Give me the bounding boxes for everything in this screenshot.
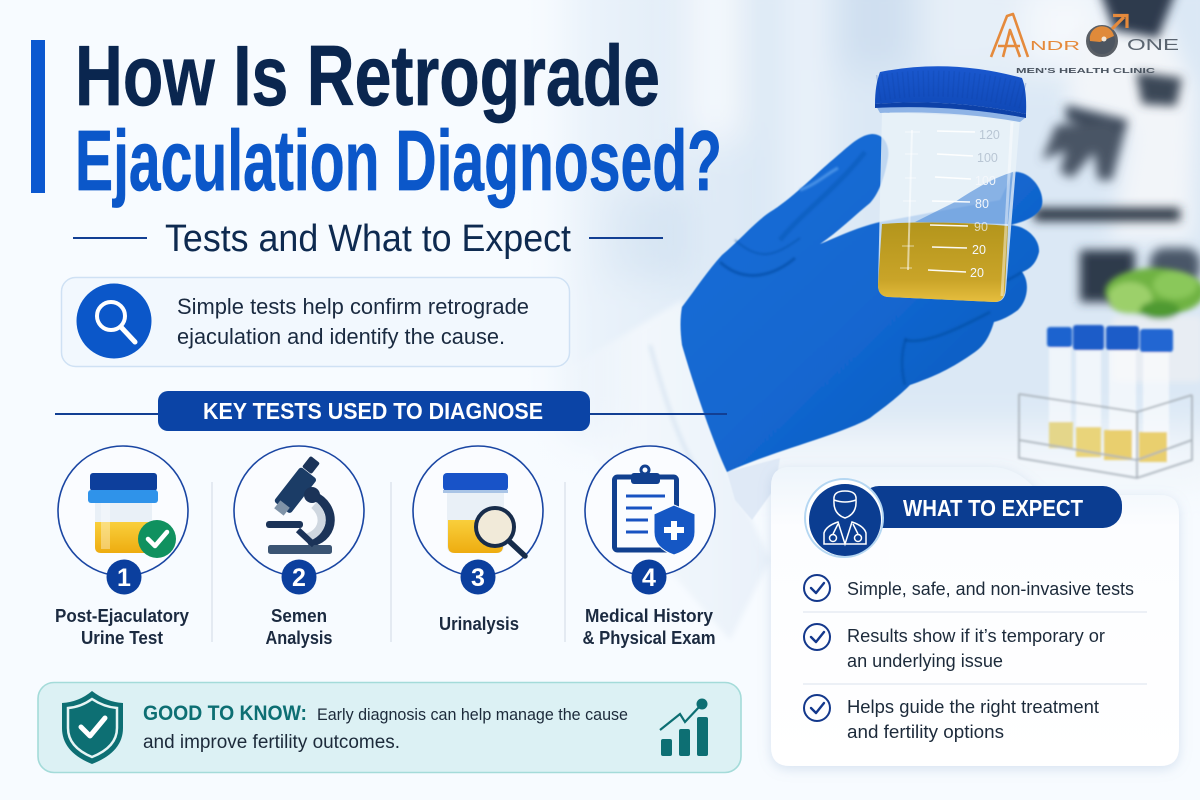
icon: rising bar chart [660,698,708,756]
title [75,29,722,209]
logo: Andro One men's health clinic [991,14,1179,75]
list item 3: and fertility options [847,722,1004,742]
blue glove [680,134,1042,472]
number badge 3 [460,560,496,594]
good to know text: and improve fertility outcomes. [143,732,400,753]
test 4: medical history and physical exam [582,446,716,648]
icon: cup with check [88,473,176,558]
good to know text [143,702,628,753]
number badge 3: 3 [471,564,485,592]
specimen cup: 120 [979,128,1000,142]
callout: simple tests [62,278,570,366]
section heading: key tests [55,391,727,431]
panel: good to know [38,682,741,772]
callout text: ejaculation and identify the cause. [177,324,505,349]
icon: magnifying glass [76,284,152,358]
label [266,606,332,648]
logo: Andro One men's health clinic: MEN'S HEALTH CLINIC [1016,66,1156,75]
callout text [177,294,529,349]
yellow liquid [878,223,1008,302]
heading pill [860,486,1122,528]
panel: what to expect [771,467,1179,766]
male symbol with sperm [1088,16,1127,56]
good to know text: Early diagnosis can help manage the cause [317,705,628,724]
specimen cup: 90 [974,220,988,234]
list item 2: Results show if it’s temporary or [847,626,1105,646]
list item 1 [804,575,1134,601]
label: Analysis [266,628,332,648]
label: Semen [271,606,327,626]
blue lid [875,66,1026,114]
list item 1: Simple, safe, and non-invasive tests [847,579,1134,599]
label: Urinalysis [439,614,519,634]
specimen cup [875,66,1026,302]
subtitle: Tests and What to Expect [165,218,571,260]
number badge 1: 1 [117,564,131,592]
title: How Is Retrograde [75,29,660,124]
cup body [878,112,1020,302]
plant [1105,268,1200,382]
list item 2 [804,624,1105,671]
number badge 2: 2 [292,564,306,592]
number badge 1 [106,560,142,594]
icon: cup with magnifier [443,473,525,556]
sample vials in a rack [1019,325,1192,478]
logo: Andro One men's health clinic: ONE [1127,37,1179,54]
good to know text: GOOD TO KNOW: [143,702,307,725]
test dividers [212,482,565,642]
cup collar [875,104,1025,122]
number badge 4 [632,560,666,594]
specimen cup: 20 [972,243,986,257]
lab coat sleeve [560,300,780,640]
label [55,606,189,648]
label: Medical History [585,606,713,626]
title: Ejaculation Diagnosed? [75,114,722,209]
icon: microscope [266,456,332,554]
glove folds and shading [720,152,1022,385]
icon: clipboard with shield [614,466,695,555]
label: Urine Test [81,628,163,648]
icon: shield with check [62,691,123,764]
list item 3: Helps guide the right treatment [847,697,1099,717]
number badge 4: 4 [642,564,656,592]
specimen cup: 80 [975,197,989,211]
graduation marks [900,131,975,272]
label: Post-Ejaculatory [55,606,189,626]
soft white fade behind the text [0,0,760,800]
specimen cup: 100 [977,151,998,165]
list item 3 [804,695,1099,742]
label [582,606,716,648]
title accent bar [31,40,45,193]
icon: doctor [805,479,883,557]
logo: Andro One men's health clinic: NDR [1030,38,1080,53]
letter A mark [991,14,1028,57]
label: & Physical Exam [582,628,716,648]
test 3: urinalysis [413,446,543,634]
microscope, out of focus [1034,0,1200,302]
section heading: key tests: KEY TESTS USED TO DIAGNOSE [203,398,543,424]
specimen cup: 100 [975,174,996,188]
number badge 2 [282,560,316,594]
test 1: post-ejaculatory urine test [55,446,189,648]
photo: gloved hand holding specimen cup [560,66,1042,640]
heading pill: WHAT TO EXPECT [903,495,1083,521]
test 2: semen analysis [234,446,364,648]
callout text: Simple tests help confirm retrograde [177,294,529,319]
specimen cup: 20 [970,266,984,280]
list item 2: an underlying issue [847,651,1003,671]
